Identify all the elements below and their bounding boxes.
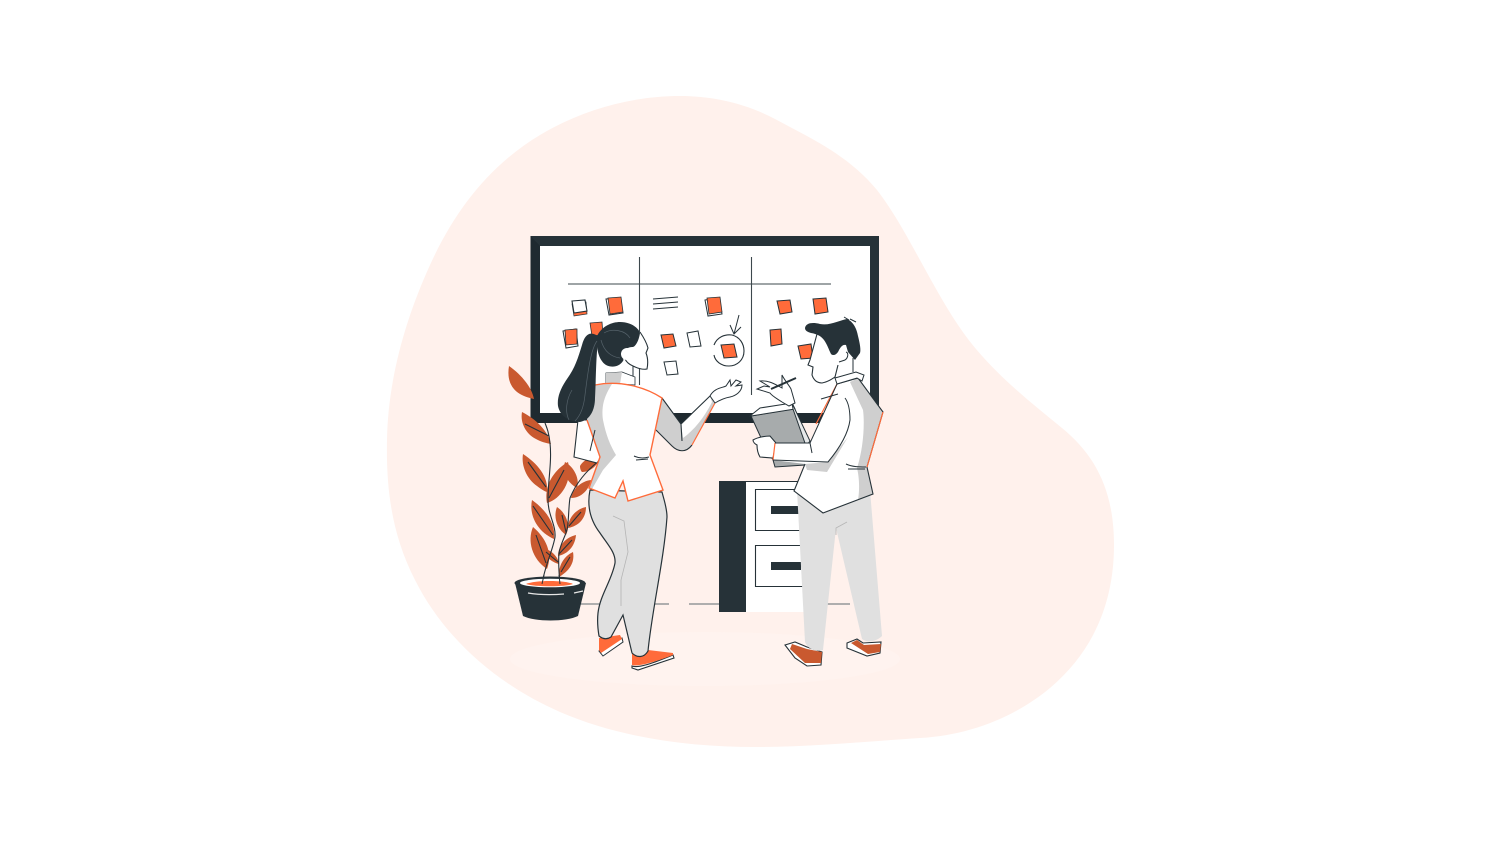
woman raised arm [656, 380, 742, 451]
man hair [805, 317, 860, 360]
man trousers [797, 490, 882, 651]
woman collar and neck [606, 365, 635, 385]
woman ear [621, 348, 633, 360]
woman jacket [587, 383, 663, 501]
ground shadow [510, 632, 900, 686]
board column lines [568, 257, 831, 395]
man raised hand with pen [757, 375, 796, 406]
woman hair [558, 322, 640, 422]
man [750, 317, 883, 666]
man face [808, 334, 846, 383]
woman hand [710, 380, 742, 403]
plant [508, 366, 601, 620]
woman face [622, 330, 648, 369]
background blob [387, 96, 1114, 747]
plant pot [514, 575, 586, 620]
sticky notes column 2 [653, 297, 744, 375]
sticky notes column 3 [770, 298, 828, 359]
drawers [756, 490, 805, 586]
woman trousers [589, 490, 667, 657]
man jacket [773, 378, 883, 513]
woman shoes [599, 635, 674, 670]
man neck [834, 358, 856, 380]
woman [558, 322, 742, 670]
man hand holding book [753, 436, 776, 458]
circled note with arrow [714, 315, 744, 366]
man shoes [785, 639, 881, 666]
plant leaves [508, 366, 601, 577]
woman rear arm [574, 420, 601, 463]
sticky notes column 1 [563, 297, 623, 348]
man ear and neck line [839, 352, 853, 372]
filing cabinet [719, 481, 806, 612]
board [530, 236, 879, 423]
plant stems [525, 423, 600, 584]
floor line [578, 603, 850, 605]
man collar [835, 372, 864, 384]
man book [750, 403, 810, 467]
